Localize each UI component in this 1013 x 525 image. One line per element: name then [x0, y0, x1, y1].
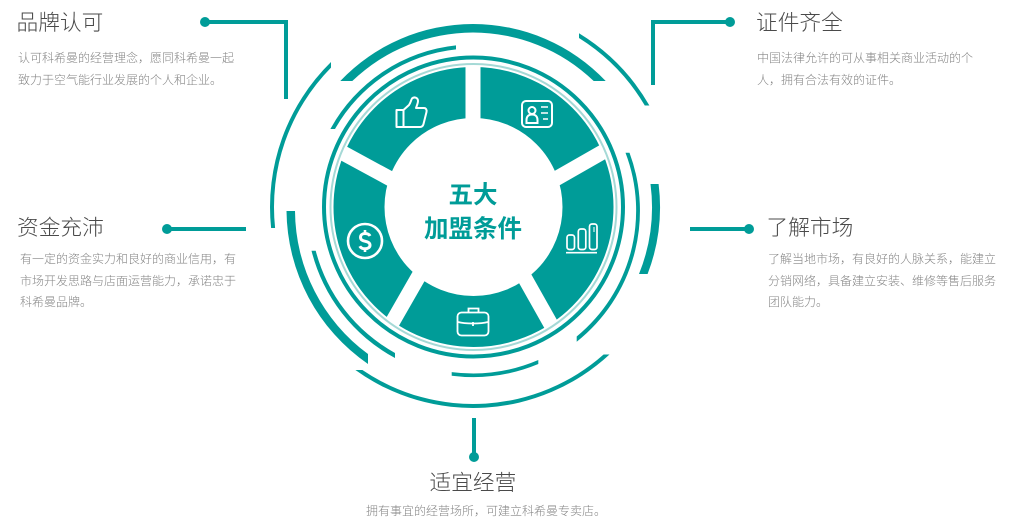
connector: complete certificates	[653, 17, 735, 85]
icon: briefcase	[458, 308, 488, 336]
text: 证件齐全 description: 人，拥有合法有效的证件。	[757, 72, 901, 86]
icon: id card	[522, 101, 552, 127]
text: 资金充沛 description: 科希曼品牌。	[20, 295, 92, 309]
text: 适宜经营 description: 拥有事宜的经营场所，可建立科希曼专卖店。	[366, 504, 606, 518]
icon: bar chart	[566, 224, 597, 253]
text: 资金充沛 description: 市场开发思路与店面运营能力，承诺忠于	[20, 274, 236, 288]
connector: sufficient funds	[162, 224, 246, 234]
heading: 了解市场: 了解市场	[766, 215, 853, 240]
connector: understand the market	[690, 224, 754, 234]
text: 资金充沛 description	[20, 252, 236, 309]
heading: 证件齐全: 证件齐全	[756, 10, 843, 35]
text: 了解市场 description: 团队能力。	[768, 295, 828, 309]
text: 了解市场 description: 分销网络，具备建立安装、维修等售后服务	[768, 274, 996, 288]
center title: 五大	[448, 182, 498, 209]
connector: suitable premises	[469, 418, 479, 462]
heading: 品牌认可: 品牌认可	[16, 10, 103, 35]
ring: inner teal ring	[324, 58, 623, 356]
center title: 加盟条件	[424, 216, 522, 243]
text: 证件齐全 description: 中国法律允许的可从事相关商业活动的个	[757, 51, 973, 65]
text: 品牌认可 description	[18, 51, 234, 86]
text: 证件齐全 description	[757, 51, 973, 86]
icon: dollar coin	[348, 224, 382, 258]
donut: five segments	[330, 60, 615, 337]
text: 了解市场 description	[768, 252, 996, 309]
heading: 资金充沛: 资金充沛	[17, 215, 104, 240]
icon: thumbs up	[396, 97, 427, 127]
text: 品牌认可 description: 致力于空气能行业发展的个人和企业。	[18, 72, 222, 86]
text: 了解市场 description: 了解当地市场，有良好的人脉关系，能建立	[768, 252, 996, 266]
ring: pale ring	[330, 64, 616, 350]
center title	[424, 182, 522, 243]
heading: 适宜经营: 适宜经营	[430, 470, 516, 495]
text: 资金充沛 description: 有一定的资金实力和良好的商业信用，有	[20, 252, 236, 266]
text: 品牌认可 description: 认可科希曼的经营理念，愿同科希曼一起	[18, 51, 234, 65]
outer decorative arcs	[270, 24, 660, 408]
connector: brand recognition	[200, 17, 286, 99]
